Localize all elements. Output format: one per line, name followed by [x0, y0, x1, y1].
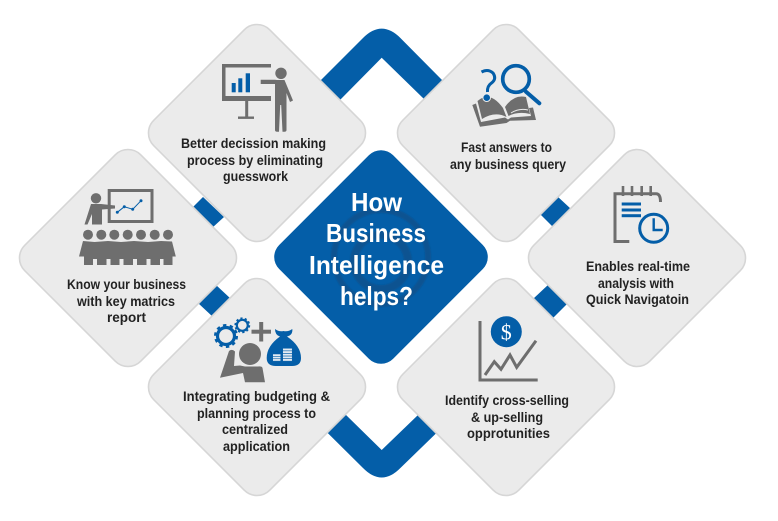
card shape — [521, 142, 753, 374]
diamond shape — [267, 143, 495, 371]
caption: Integrating budgeting & — [183, 389, 330, 404]
caption: opprotunities — [467, 426, 550, 441]
caption — [183, 389, 330, 454]
card shape — [12, 142, 244, 374]
title: helps? — [340, 281, 413, 311]
icon: growth chart and dollar coin — [480, 316, 538, 380]
caption — [181, 136, 326, 184]
caption: Quick Navigatoin — [586, 292, 689, 307]
caption: Know your business — [67, 277, 186, 292]
caption: Enables real-time — [586, 259, 690, 274]
title: Business — [326, 218, 426, 248]
panel: cross-selling — [390, 271, 622, 503]
panel: integrating budgeting — [141, 271, 373, 503]
card shape — [141, 271, 373, 503]
icon: presenter and audience — [79, 190, 176, 265]
title: Intelligence — [309, 250, 444, 280]
card shape — [390, 271, 622, 503]
caption: with key matrics — [76, 294, 175, 309]
caption: report — [107, 310, 146, 325]
caption: planning process to — [197, 406, 316, 421]
title: How — [351, 187, 403, 217]
connector square upper left — [192, 197, 224, 228]
caption: analysis with — [598, 276, 674, 291]
icon: presenter with chart — [222, 64, 293, 132]
caption: any business query — [450, 157, 566, 172]
panel: real-time analysis — [521, 142, 753, 374]
caption: Fast answers to — [461, 140, 552, 155]
card shape — [390, 17, 622, 249]
card shape — [141, 17, 373, 249]
caption: Identify cross-selling — [445, 393, 569, 408]
panel: key metrics report — [12, 142, 244, 374]
icon: gears, person and money bag — [215, 318, 301, 382]
bottom chevron connector — [327, 414, 437, 478]
icon: growth chart and dollar coin: $ — [501, 320, 512, 344]
caption: Better decission making — [181, 136, 326, 151]
caption: centralized — [222, 422, 288, 437]
caption — [586, 259, 690, 307]
panel: better decision making — [141, 17, 373, 249]
icon: notebook and clock — [615, 186, 668, 242]
top chevron connector — [320, 29, 443, 100]
panel: fast answers — [390, 17, 622, 249]
connector square upper right — [539, 196, 571, 227]
caption: process by eliminating — [187, 153, 323, 168]
caption — [450, 140, 566, 172]
caption: guesswork — [223, 169, 288, 184]
panel: central diamond — [267, 143, 495, 371]
icon: book, question mark and magnifier — [472, 66, 539, 127]
watermark rings — [334, 210, 428, 304]
caption: application — [223, 439, 290, 454]
caption — [445, 393, 569, 441]
connector square lower right — [533, 284, 568, 318]
caption: & up-selling — [471, 410, 543, 425]
connector square lower left — [198, 285, 231, 317]
title — [309, 187, 444, 311]
caption — [67, 277, 186, 325]
